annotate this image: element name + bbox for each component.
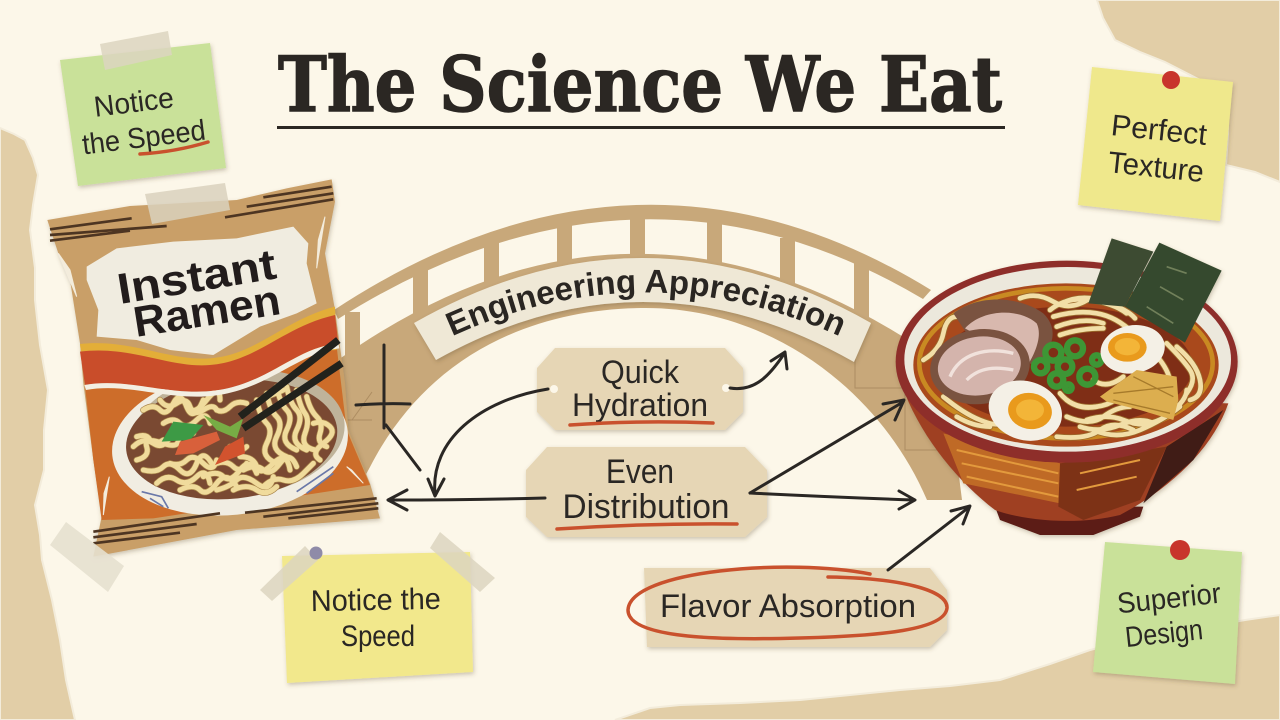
tag underline xyxy=(570,422,713,425)
packet creases xyxy=(58,217,363,515)
tape: loose, left xyxy=(50,522,124,592)
bowl base xyxy=(995,507,1143,535)
bridge top rail xyxy=(334,205,931,319)
torn kraft paper: top right xyxy=(1097,0,1280,182)
note text xyxy=(1116,578,1223,654)
packet red wave xyxy=(80,315,338,392)
title: The Science We Eat xyxy=(278,40,1002,129)
packet vegetables xyxy=(162,415,245,465)
tag: Even Distribution xyxy=(526,447,767,537)
tag text: Flavor Absorption xyxy=(660,588,916,624)
sticky note: Superior Design (green) xyxy=(1093,540,1242,684)
bridge railing posts xyxy=(345,216,869,362)
scallions xyxy=(1034,340,1101,391)
tape left xyxy=(260,546,318,601)
title underline xyxy=(277,126,1005,129)
note text: Notice xyxy=(92,82,176,124)
note text xyxy=(1107,109,1209,189)
packet noodles xyxy=(133,387,332,493)
packet chopsticks xyxy=(240,340,342,428)
soft egg left xyxy=(981,371,1070,450)
note text xyxy=(80,82,207,162)
arrow: flavor to bowl xyxy=(888,506,970,570)
note text: Notice the xyxy=(311,583,441,618)
bowl rim xyxy=(896,261,1238,463)
sticky note: Perfect Texture (yellow) xyxy=(1078,67,1233,221)
note text: Superior xyxy=(1116,578,1223,620)
bowl noodles xyxy=(923,296,1201,437)
torn kraft paper: bottom right xyxy=(615,615,1280,720)
bridge label: Engineering Appreciation xyxy=(445,270,844,336)
arrows xyxy=(388,352,970,570)
note text: Speed xyxy=(341,620,415,653)
soft egg right xyxy=(1097,320,1169,379)
note text: Design xyxy=(1124,614,1205,654)
tag text: Distribution xyxy=(562,488,730,526)
ramen bowl xyxy=(896,238,1238,535)
bridge banner xyxy=(414,258,872,364)
torn kraft paper: left xyxy=(0,128,75,720)
nori sheets xyxy=(1088,238,1222,343)
chashu pork slices xyxy=(925,300,1053,411)
tape xyxy=(100,31,172,70)
arrow: distribution to packet xyxy=(388,490,545,510)
sketch marks on bridge xyxy=(356,345,420,470)
note text: the Speed xyxy=(80,115,207,162)
sticky note: Notice the Speed (green) xyxy=(60,31,226,186)
arrow: distribution to bowl rim xyxy=(750,400,904,493)
packet name xyxy=(114,241,284,347)
instant ramen packet xyxy=(47,179,380,557)
bowl broth xyxy=(913,283,1219,447)
packet stripes xyxy=(50,187,378,543)
tag text xyxy=(572,354,708,423)
note underline xyxy=(140,142,208,154)
bowl body xyxy=(905,393,1228,521)
tag: Flavor Absorption xyxy=(628,567,947,647)
tag underline xyxy=(557,524,737,529)
bridge: Engineering Appreciation arch xyxy=(335,204,962,500)
tag text xyxy=(562,453,730,526)
tag text: Hydration xyxy=(572,387,708,423)
packet yellow wave xyxy=(80,307,337,390)
pin xyxy=(1170,540,1190,560)
note text xyxy=(311,583,441,653)
sticky note: Notice the Speed (yellow) xyxy=(260,532,495,683)
red circle annotation xyxy=(628,567,947,639)
packet white label xyxy=(87,227,317,355)
pin xyxy=(310,546,322,560)
packet body xyxy=(47,179,380,557)
menma bamboo shoots xyxy=(1100,370,1178,420)
tag holes xyxy=(550,384,730,393)
tape on packet xyxy=(145,183,230,224)
packet name: Instant xyxy=(114,241,280,314)
tag text: Even xyxy=(606,453,674,491)
packet bowl xyxy=(105,360,355,527)
bridge arch body xyxy=(338,254,962,500)
note text: Perfect xyxy=(1110,109,1209,152)
arrow: distribution to bowl base xyxy=(750,491,915,509)
tape right xyxy=(430,532,495,592)
packet name: Ramen xyxy=(130,276,284,347)
note text: Texture xyxy=(1107,146,1205,189)
packet lower orange panel xyxy=(85,347,370,520)
arrow: hydration to packet line xyxy=(428,389,548,496)
tag: Quick Hydration xyxy=(537,348,743,430)
pin xyxy=(1162,71,1180,89)
tag text: Quick xyxy=(601,354,680,390)
arrow: hydration to arch xyxy=(730,352,787,389)
